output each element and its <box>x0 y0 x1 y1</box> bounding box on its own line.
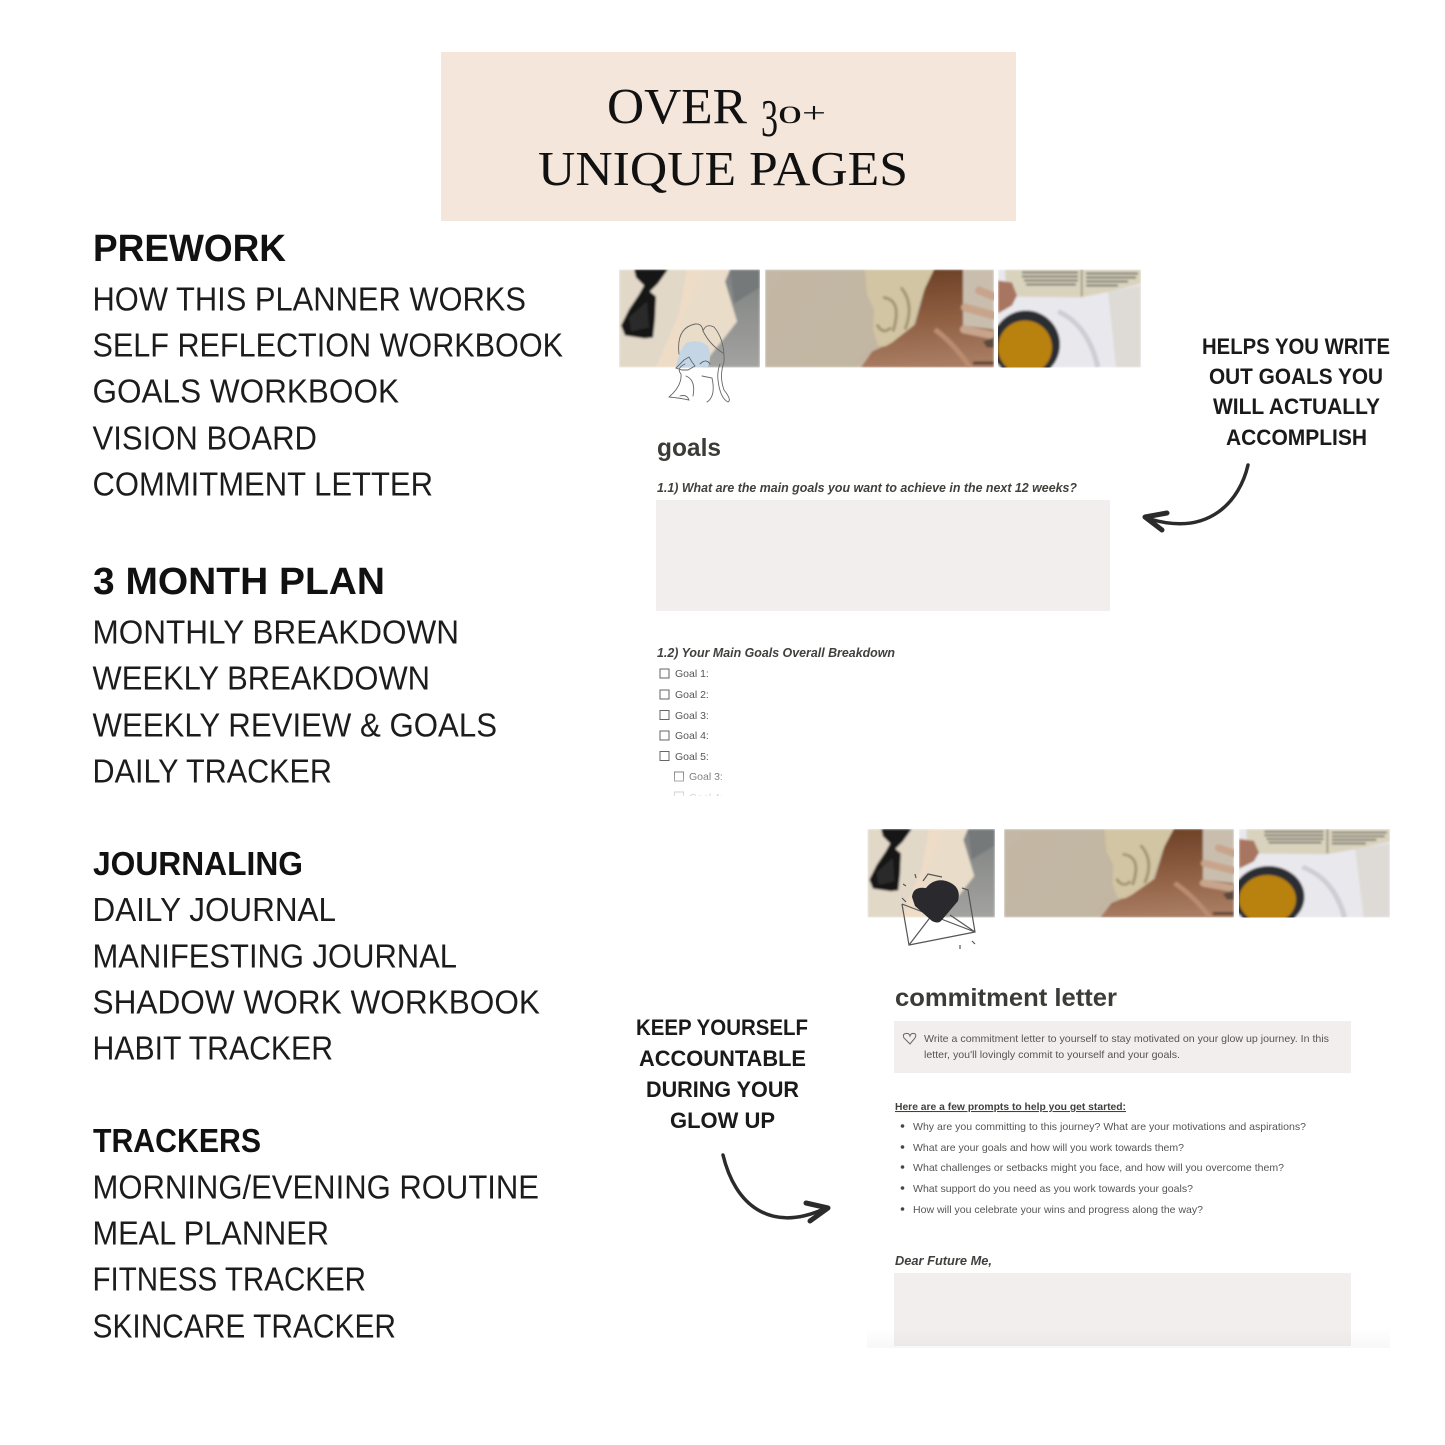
icon: heart <box>903 1033 916 1044</box>
goal checklist: Goal 2: <box>675 689 709 701</box>
callout box: letter, you'll lovingly commit to yourself and your goals. <box>924 1049 1180 1061</box>
prompts list <box>901 1121 1306 1216</box>
panel: commitment letter page screenshot <box>867 829 1390 1348</box>
goal checklist: Goal 5: <box>675 751 709 763</box>
list: 3 month plan: DAILY TRACKER <box>92 754 332 790</box>
letter salutation: Dear Future Me, <box>895 1253 992 1268</box>
list: prework <box>92 228 563 504</box>
photo banner: goals page <box>619 270 1141 378</box>
callout: goals: HELPS YOU WRITE <box>1202 334 1390 359</box>
prompts list: What challenges or setbacks might you face, and how will you overcome them? <box>913 1162 1284 1174</box>
list: trackers: MEAL PLANNER <box>92 1216 329 1252</box>
prompts list: What are your goals and how will you work towards them? <box>913 1142 1184 1154</box>
icon: envelope with heart <box>902 874 975 949</box>
title line 1: 3 <box>761 90 778 148</box>
callout: goals: WILL ACTUALLY <box>1213 394 1380 419</box>
crop at page bottom <box>615 796 1150 810</box>
prompts list: Why are you committing to this journey? What are your motivations and aspirations? <box>913 1121 1306 1133</box>
callout: goals: ACCOMPLISH <box>1226 425 1367 450</box>
list: trackers: MORNING/EVENING ROUTINE <box>92 1170 539 1206</box>
heading: goals: goals <box>657 434 721 462</box>
goal checklist <box>660 668 723 804</box>
answer box <box>656 500 1110 611</box>
callout box <box>894 1021 1351 1073</box>
heading: trackers: TRACKERS <box>93 1122 261 1159</box>
goal checklist: Goal 4: <box>689 792 723 804</box>
callout: goals <box>1202 334 1390 450</box>
title banner <box>441 52 1016 221</box>
list: prework: VISION BOARD <box>92 420 317 458</box>
prompts list: How will you celebrate your wins and progress along the way? <box>913 1204 1203 1216</box>
list: 3 month plan: MONTHLY BREAKDOWN <box>92 614 459 652</box>
page bottom shadow <box>867 1328 1390 1348</box>
heading: prework: PREWORK <box>93 228 287 270</box>
title line 1: + <box>802 98 826 130</box>
prompt 1.1: 1.1) What are the main goals you want to achieve in the next 12 weeks? <box>657 480 1077 495</box>
panel: goals page screenshot <box>615 270 1150 810</box>
list: journaling: DAILY JOURNAL <box>92 892 336 929</box>
fade at page bottom <box>615 768 1150 797</box>
icon: line-art woman <box>669 324 729 402</box>
list: trackers <box>92 1122 539 1346</box>
list: trackers: SKINCARE TRACKER <box>92 1308 396 1346</box>
title line 1: OVER <box>607 80 747 136</box>
photo banner: commitment page <box>868 829 1390 927</box>
title line 1: 0 <box>778 102 802 129</box>
prompts list: What support do you need as you work towards your goals? <box>913 1183 1193 1195</box>
goal checklist: Goal 3: <box>689 771 723 783</box>
callout: commitment: ACCOUNTABLE <box>639 1046 806 1071</box>
list: 3 month plan <box>92 561 497 790</box>
letter box <box>894 1273 1351 1346</box>
arrow: to commitment page <box>723 1155 828 1221</box>
list: trackers: FITNESS TRACKER <box>92 1262 366 1298</box>
callout box: Write a commitment letter to yourself to stay motivated on your glow up journey. In this <box>924 1033 1329 1045</box>
callout: goals: OUT GOALS YOU <box>1209 364 1383 389</box>
heading: 3 month plan: 3 MONTH PLAN <box>93 561 385 603</box>
goal checklist: Goal 1: <box>675 668 709 680</box>
heading: journaling: JOURNALING <box>93 845 303 882</box>
title line 1 <box>607 80 826 148</box>
list: journaling: MANIFESTING JOURNAL <box>92 938 457 976</box>
title line 2: UNIQUE PAGES <box>538 141 908 196</box>
goal checklist: Goal 3: <box>675 710 709 722</box>
callout: commitment <box>636 1015 808 1133</box>
callout: commitment: DURING YOUR <box>646 1077 799 1102</box>
heading: commitment letter: commitment letter <box>895 984 1117 1012</box>
list: prework: SELF REFLECTION WORKBOOK <box>92 328 563 364</box>
list: journaling: HABIT TRACKER <box>92 1030 333 1068</box>
list: 3 month plan: WEEKLY REVIEW & GOALS <box>92 708 497 744</box>
list: journaling: SHADOW WORK WORKBOOK <box>92 984 540 1022</box>
callout: commitment: KEEP YOURSELF <box>636 1015 808 1040</box>
prompts heading: Here are a few prompts to help you get started: <box>895 1101 1126 1113</box>
list: prework: COMMITMENT LETTER <box>92 466 433 504</box>
arrow: to goals page <box>1145 465 1248 530</box>
list: prework: HOW THIS PLANNER WORKS <box>92 282 526 318</box>
goal checklist: Goal 4: <box>675 730 709 742</box>
list: journaling <box>92 845 540 1068</box>
list: 3 month plan: WEEKLY BREAKDOWN <box>92 660 430 698</box>
list: prework: GOALS WORKBOOK <box>92 374 399 410</box>
prompt 1.2: 1.2) Your Main Goals Overall Breakdown <box>657 645 895 660</box>
callout: commitment: GLOW UP <box>670 1108 775 1133</box>
